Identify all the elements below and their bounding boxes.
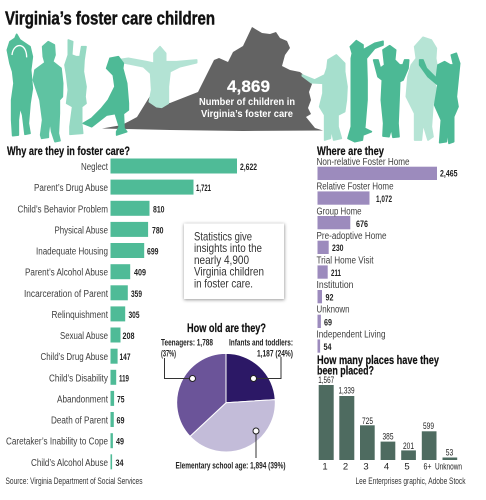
map caption: Virginia’s foster care bbox=[201, 108, 293, 120]
heading: places: How many places have they bbox=[317, 355, 439, 367]
placement labels: Group Home bbox=[316, 206, 362, 217]
category labels: Parent’s Drug Abuse bbox=[34, 183, 108, 194]
category labels: Parent’s Alcohol Abuse bbox=[25, 268, 108, 279]
category labels: Neglect bbox=[81, 162, 108, 173]
child 5 bbox=[122, 47, 197, 107]
placement labels: Pre-adoptive Home bbox=[316, 231, 387, 242]
pie labels: (37%) bbox=[161, 348, 176, 360]
values: 147 bbox=[120, 352, 130, 363]
callout: nearly 4,900 bbox=[194, 253, 249, 267]
values: 34 bbox=[116, 458, 124, 469]
leader lines bbox=[164, 357, 281, 458]
heading: places bbox=[317, 355, 439, 378]
values: 49 bbox=[116, 437, 124, 448]
callout bbox=[184, 224, 284, 300]
column values: 385 bbox=[382, 432, 394, 442]
map caption bbox=[199, 96, 295, 120]
child 1 bbox=[7, 34, 32, 136]
panel: how old are they bbox=[161, 323, 293, 472]
category labels: Child’s Drug Abuse bbox=[40, 352, 108, 363]
panel: where are they bbox=[316, 146, 458, 353]
category labels: Relinquishment bbox=[52, 310, 108, 321]
silhouettes of children, left group bbox=[7, 34, 197, 142]
column values: 1,339 bbox=[338, 386, 354, 396]
column values bbox=[318, 375, 453, 458]
heading: age: How old are they? bbox=[187, 323, 266, 335]
placement labels: Non-relative Foster Home bbox=[316, 157, 410, 168]
child 6 bbox=[302, 55, 347, 140]
heading: places: been placed? bbox=[317, 366, 374, 378]
map caption: Number of children in bbox=[199, 96, 295, 108]
values: 780 bbox=[152, 225, 164, 236]
column values: 599 bbox=[423, 421, 434, 432]
callout: insights into the bbox=[194, 241, 262, 255]
column axis labels: 1 bbox=[322, 462, 328, 472]
values: 208 bbox=[122, 331, 134, 342]
category labels: Sexual Abuse bbox=[60, 331, 108, 342]
column axis labels: 4 bbox=[384, 462, 389, 472]
category labels: Child’s Alcohol Abuse bbox=[31, 458, 108, 469]
heading: why: Why are they in foster care? bbox=[7, 146, 130, 158]
heading: where: Where are they bbox=[317, 146, 384, 158]
placement values: 92 bbox=[326, 292, 334, 304]
column axis labels: 5 bbox=[404, 462, 410, 472]
column values: 725 bbox=[362, 416, 373, 427]
source note: Source: Virginia Department of Social Services bbox=[6, 476, 143, 486]
values: 75 bbox=[117, 394, 125, 405]
child 2 bbox=[33, 42, 63, 142]
pie labels: Teenagers: 1,788 bbox=[161, 338, 213, 348]
child 9 bbox=[406, 37, 438, 140]
column axis labels: 6+ bbox=[424, 462, 432, 472]
placement labels: Institution bbox=[316, 280, 354, 291]
silhouettes of children, right group bbox=[302, 37, 460, 143]
placement labels: Relative Foster Home bbox=[316, 182, 394, 193]
values: 69 bbox=[116, 416, 124, 426]
placement values: 54 bbox=[324, 342, 332, 353]
placement values: 676 bbox=[356, 219, 368, 230]
category labels: Child’s Disability bbox=[49, 373, 108, 384]
callout: in foster care. bbox=[194, 276, 253, 290]
column axis labels: Unknown bbox=[435, 462, 462, 472]
pie labels bbox=[161, 338, 293, 472]
placement values: 2,465 bbox=[440, 168, 458, 180]
bars bbox=[110, 158, 237, 469]
pie labels: 1,187 (24%) bbox=[257, 348, 293, 360]
column axis labels: 2 bbox=[343, 462, 348, 472]
values: 119 bbox=[119, 373, 129, 384]
category labels: Physical Abuse bbox=[54, 225, 108, 236]
child 3 bbox=[65, 40, 86, 134]
values: 409 bbox=[134, 268, 146, 279]
category labels: Caretaker’s Inability to Cope bbox=[6, 437, 108, 448]
child 4 bbox=[83, 57, 128, 135]
map of Virginia with total bbox=[102, 27, 323, 131]
placement values bbox=[324, 168, 458, 353]
placement values: 69 bbox=[324, 318, 332, 328]
category labels: Incarceration of Parent bbox=[24, 289, 108, 300]
column axis labels: 3 bbox=[363, 462, 369, 472]
category labels: Child’s Behavior Problem bbox=[18, 204, 108, 215]
leader dots bbox=[190, 376, 259, 434]
placement labels: Independent Living bbox=[316, 329, 386, 340]
placement labels: Trial Home Visit bbox=[316, 256, 374, 267]
placement labels: Unknown bbox=[316, 305, 350, 316]
child 10 bbox=[420, 53, 460, 143]
values: 305 bbox=[128, 310, 140, 321]
placement values: 230 bbox=[332, 243, 344, 254]
values: 359 bbox=[131, 289, 142, 300]
column values: 1,567 bbox=[318, 375, 334, 386]
purple bars bbox=[318, 167, 437, 353]
callout: Statistics give bbox=[194, 230, 252, 244]
category labels: Abandonment bbox=[57, 394, 108, 405]
values: 1,721 bbox=[196, 183, 211, 194]
child 7 bbox=[348, 41, 383, 142]
values: 699 bbox=[147, 246, 158, 258]
column values: 201 bbox=[403, 441, 414, 452]
values: 810 bbox=[153, 204, 164, 215]
pie labels: Infants and toddlers: bbox=[229, 338, 293, 348]
category labels: Inadequate Housing bbox=[36, 246, 108, 258]
category labels bbox=[6, 162, 108, 469]
placement labels bbox=[316, 157, 410, 340]
panel: why are they in foster care bbox=[6, 146, 257, 469]
column values: 53 bbox=[446, 448, 453, 458]
child 8 bbox=[374, 46, 409, 137]
values: 2,622 bbox=[240, 162, 257, 173]
panel: how many places bbox=[317, 355, 462, 472]
values bbox=[116, 162, 257, 469]
placement values: 1,072 bbox=[376, 194, 392, 205]
pie chart bbox=[177, 353, 275, 452]
category labels: Death of Parent bbox=[51, 416, 108, 426]
placement values: 211 bbox=[331, 268, 341, 279]
column axis labels bbox=[322, 462, 462, 472]
total number: 4,869 bbox=[227, 78, 270, 96]
title: Virginia’s foster care children bbox=[5, 8, 215, 28]
pie labels: Elementary school age: 1,894 (39%) bbox=[176, 460, 286, 472]
callout: Virginia children bbox=[194, 265, 264, 279]
column chart bbox=[319, 385, 457, 460]
